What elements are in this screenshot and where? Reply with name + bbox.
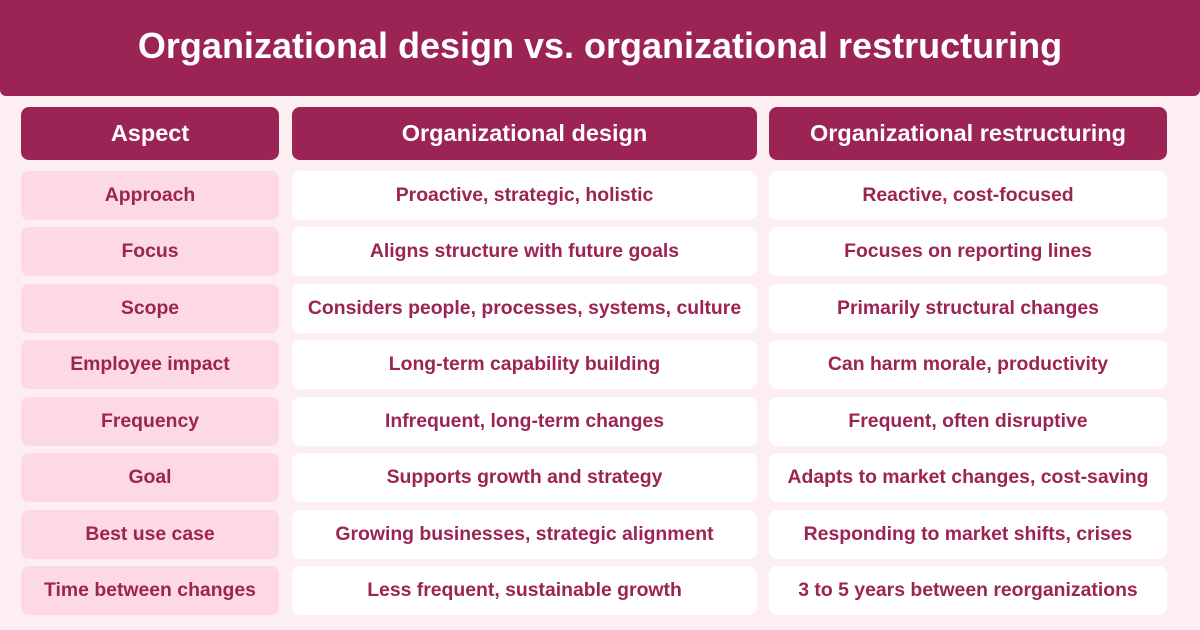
row: goal: Supports growth and strategy bbox=[387, 466, 662, 488]
row: goal bbox=[21, 453, 1167, 502]
row: employee impact: Long-term capability building bbox=[389, 353, 660, 375]
header: aspect bbox=[21, 107, 279, 160]
title bbox=[0, 0, 1200, 96]
row: frequency: Frequency bbox=[101, 410, 199, 432]
header: organizational restructuring bbox=[769, 107, 1167, 160]
row: scope: Scope bbox=[121, 297, 179, 319]
row: time between changes: Time between changes bbox=[44, 579, 256, 601]
row: best use case bbox=[21, 510, 1167, 559]
row: focus: Focus bbox=[121, 240, 179, 262]
row: focus: Focuses on reporting lines bbox=[844, 240, 1092, 262]
row: focus bbox=[21, 227, 1167, 276]
title: Organizational design vs. organizational restructuring bbox=[138, 25, 1062, 66]
row: time between changes bbox=[21, 566, 1167, 615]
row: time between changes: 3 to 5 years between reorganizations bbox=[798, 579, 1138, 601]
header: aspect: Aspect bbox=[111, 120, 189, 146]
row: scope: Primarily structural changes bbox=[837, 297, 1099, 319]
row: frequency: Infrequent, long-term changes bbox=[385, 410, 664, 432]
row: frequency: Frequent, often disruptive bbox=[848, 410, 1088, 432]
row: employee impact: Employee impact bbox=[70, 353, 230, 375]
row: focus: Aligns structure with future goals bbox=[370, 240, 679, 262]
row: approach: Approach bbox=[105, 184, 195, 206]
header: organizational design: Organizational design bbox=[402, 120, 647, 146]
row: best use case: Best use case bbox=[85, 523, 215, 545]
row: frequency bbox=[21, 397, 1167, 446]
row: goal: Adapts to market changes, cost-saving bbox=[788, 466, 1148, 488]
row: best use case: Growing businesses, strategic alignment bbox=[335, 523, 714, 545]
row: employee impact: Can harm morale, productivity bbox=[828, 353, 1108, 375]
row: time between changes: Less frequent, sustainable growth bbox=[367, 579, 682, 601]
row: goal: Goal bbox=[128, 466, 172, 488]
row: approach: Reactive, cost-focused bbox=[862, 184, 1074, 206]
row: employee impact bbox=[21, 340, 1167, 389]
header: organizational restructuring: Organizational restructuring bbox=[810, 120, 1126, 146]
row: scope: Considers people, processes, systems, culture bbox=[308, 297, 741, 319]
row: approach: Proactive, strategic, holistic bbox=[396, 184, 653, 206]
row: scope bbox=[21, 284, 1167, 333]
row: approach bbox=[21, 171, 1167, 220]
row: best use case: Responding to market shifts, crises bbox=[804, 523, 1132, 545]
header: organizational design bbox=[292, 107, 757, 160]
